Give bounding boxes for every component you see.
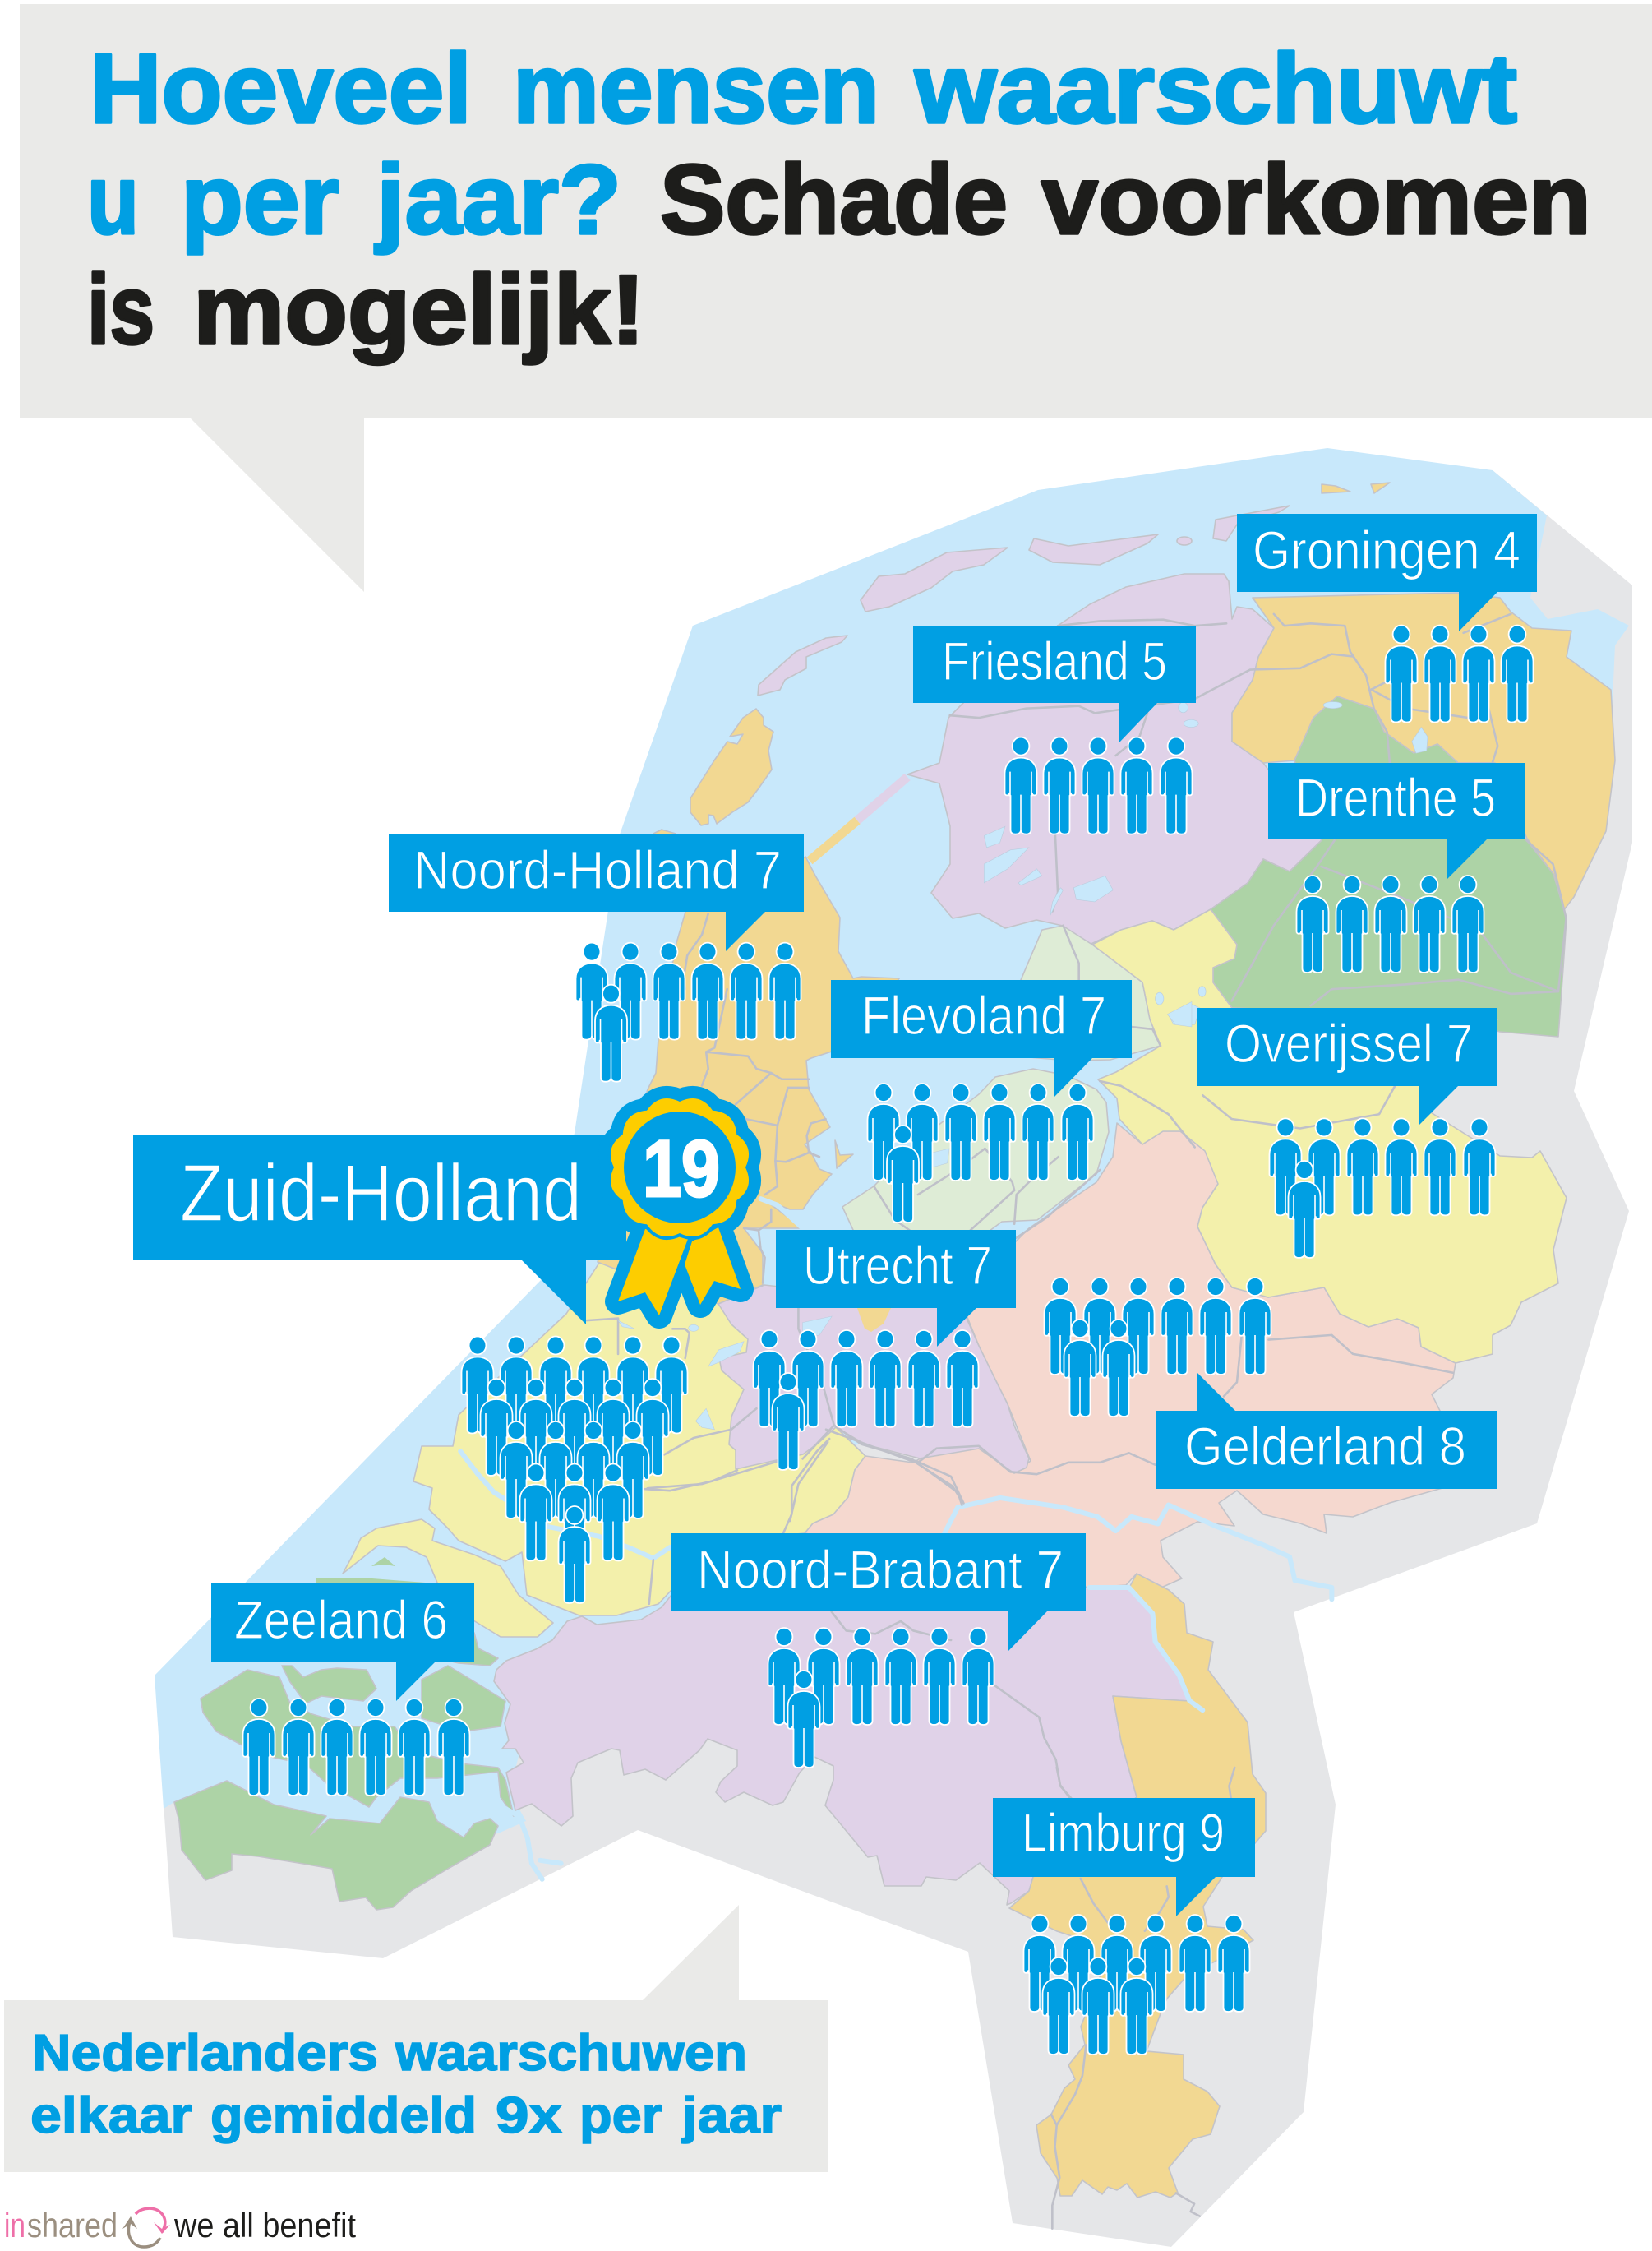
title: mogelijk!: [193, 255, 645, 365]
callout: Drenthe 5: Drenthe 5: [1295, 767, 1496, 828]
province: Groningen: [1232, 593, 1615, 911]
callout: Overijssel 7: [1197, 1008, 1497, 1125]
people: Overijssel: [1269, 1118, 1496, 1258]
land background: [164, 470, 1632, 2247]
title: waarschuwt: [914, 34, 1517, 144]
island: Terschelling: [861, 548, 1008, 612]
title: jaar?: [375, 145, 621, 255]
rivers lower: [826, 1170, 1453, 1710]
province: Noordoostpolder: [1019, 926, 1161, 1061]
title: voorkomen: [1041, 145, 1591, 255]
island: Vlieland: [758, 636, 847, 696]
title: [87, 34, 1591, 365]
callout: Noord-Holland 7: Noord-Holland 7: [413, 839, 782, 900]
people: Utrecht: [753, 1330, 978, 1470]
people: Flevoland: [868, 1084, 1093, 1223]
Afsluitdijk: [857, 777, 907, 820]
callout: Friesland 5: Friesland 5: [942, 631, 1167, 691]
title: Schade: [660, 145, 1008, 255]
people: Friesland: [1004, 737, 1192, 834]
average text: per: [579, 2087, 662, 2144]
title: u: [87, 145, 139, 255]
icon: rosette badge 19: [611, 1098, 749, 1315]
title: mensen: [513, 34, 879, 144]
title: is: [87, 255, 155, 365]
logo: inshared we all benefit: we all benefit: [173, 2206, 356, 2244]
callout: Utrecht 7: Utrecht 7: [803, 1235, 992, 1296]
callout: Flevoland 7: [831, 980, 1132, 1098]
province: Limburg: [1009, 1574, 1266, 2198]
title: Hoeveel: [90, 34, 472, 144]
average text: [30, 2025, 782, 2144]
logo: inshared we all benefit: shared: [27, 2206, 118, 2244]
callout: Noord-Brabant 7: Noord-Brabant 7: [697, 1539, 1064, 1600]
people: Gelderland: [1044, 1278, 1271, 1417]
average text: Nederlanders: [32, 2025, 378, 2082]
people: Noord-Holland: [575, 943, 801, 1082]
callout: Groningen 4: Groningen 4: [1253, 520, 1520, 580]
island: Marken: [835, 1140, 853, 1168]
rivers and roads south-west: [460, 1439, 1071, 1879]
province: Utrecht: [718, 1285, 1029, 1473]
average text: jaar: [681, 2087, 782, 2144]
island: Texel: [690, 709, 773, 825]
callout: Friesland 5: [913, 626, 1196, 743]
callout: Gelderland 8: Gelderland 8: [1184, 1416, 1466, 1477]
map: Netherlands with provinces: [155, 448, 1632, 2247]
province: Zeeland Schouwen: [282, 1666, 376, 1703]
province: Noord-Holland: [598, 830, 899, 1304]
average text: elkaar: [30, 2087, 192, 2144]
roads south: [1051, 1768, 1234, 2229]
people: Zuid-Holland: [462, 1337, 687, 1603]
province: Friesland: [907, 574, 1322, 947]
logo: inshared we all benefit: [4, 2206, 356, 2247]
island: Ameland: [1029, 534, 1158, 565]
average text: gemiddeld: [210, 2087, 477, 2144]
island: Rottum: [1322, 484, 1350, 493]
islet near Goeree: [371, 1557, 395, 1566]
callout: Limburg 9: Limburg 9: [1022, 1802, 1225, 1863]
panel: title speech bubble: [20, 4, 1652, 592]
province: Noord-Brabant: [494, 1588, 1189, 1905]
roads north: [950, 614, 1567, 1147]
callout: Limburg 9: [993, 1798, 1255, 1916]
icon: rosette badge 19: 19: [643, 1124, 720, 1213]
province: Goeree-Overflakkee: [343, 1519, 553, 1637]
title: per: [181, 145, 339, 255]
island: Schiermonnikoog: [1213, 506, 1290, 541]
people: Zeeland: [243, 1699, 470, 1796]
province: Zeeuws-Vlaanderen: [174, 1781, 498, 1910]
province: Overijssel: [1092, 909, 1567, 1363]
callout: Noord-Brabant 7: [671, 1533, 1086, 1651]
callout: Groningen 4: [1237, 514, 1537, 631]
island: small sandbank: [1177, 537, 1192, 545]
province: Zeeland top strip: [316, 1578, 436, 1583]
province: Flevoland: [842, 1069, 1109, 1233]
callout: Zeeland 6: Zeeland 6: [234, 1589, 448, 1650]
province: Zeeland Zuid-Beveland: [422, 1666, 505, 1731]
province: Zeeland Walcheren and Beveland: [201, 1670, 514, 1816]
province: Drenthe: [1211, 696, 1567, 1037]
callout: Noord-Holland 7: [389, 834, 804, 951]
province: Zeeland Tholen: [448, 1633, 498, 1666]
roads centre: [587, 913, 1192, 1521]
people: Noord-Brabant: [768, 1628, 994, 1768]
people: Drenthe: [1297, 876, 1484, 973]
province: Gelderland: [805, 1123, 1456, 1590]
callout: Overijssel 7: Overijssel 7: [1225, 1013, 1473, 1074]
average text: 9x: [496, 2087, 563, 2144]
callout: Zuid-Holland: [133, 1135, 626, 1324]
people: Limburg: [1024, 1915, 1249, 2055]
callout: Drenthe 5: [1268, 763, 1525, 879]
callout: Utrecht 7: [776, 1230, 1016, 1347]
callout: Gelderland 8: [1156, 1372, 1497, 1489]
sea: [155, 448, 1629, 1850]
island: Rottumeroog: [1371, 483, 1390, 493]
logo: inshared we all benefit: in: [4, 2206, 25, 2244]
average text: waarschuwen: [395, 2025, 747, 2082]
province: Zuid-Holland main: [413, 1260, 865, 1615]
panel: average speech bubble: [4, 1905, 828, 2172]
people: Groningen: [1386, 625, 1534, 722]
orange bite in Utrecht: [857, 1308, 891, 1332]
callout: Zuid-Holland: Zuid-Holland: [180, 1148, 582, 1238]
callout: Flevoland 7: Flevoland 7: [861, 985, 1106, 1046]
callout: Zeeland 6: [211, 1583, 474, 1701]
